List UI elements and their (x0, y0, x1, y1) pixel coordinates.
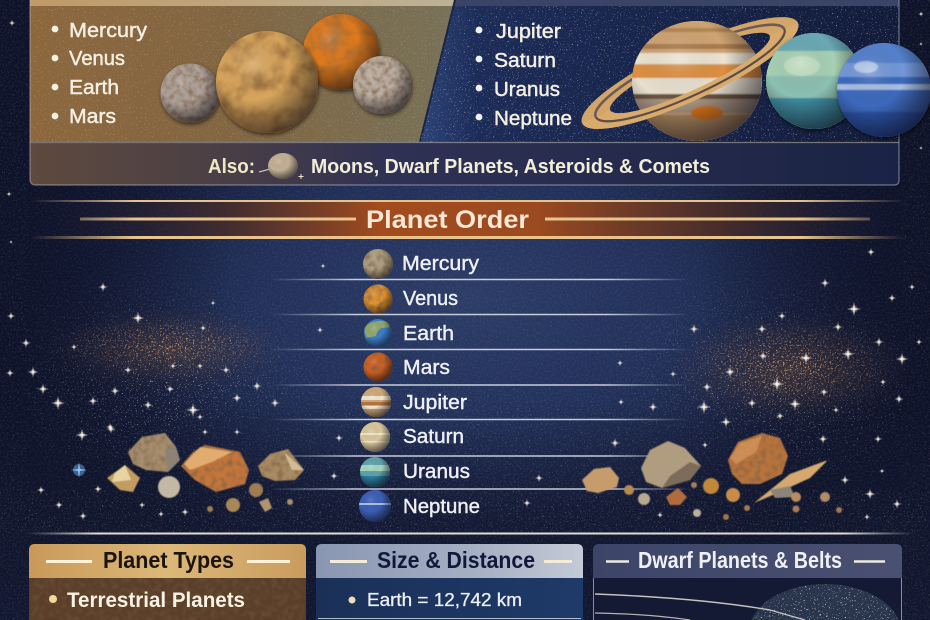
heading: Dwarf Planets & Belts (638, 547, 842, 573)
heading (29, 544, 306, 578)
item: uranus: Uranus (403, 461, 470, 483)
list: terrestrial planets: Mercury (69, 20, 147, 42)
list: terrestrial planets: Earth (69, 77, 119, 99)
icon: small asteroid (259, 153, 304, 179)
footer note: Moons, Dwarf Planets, Asteroids & Comets (311, 156, 710, 178)
panel: size and distance (316, 544, 583, 620)
list: gas giants (476, 21, 572, 130)
heading: Size & Distance (377, 547, 535, 573)
item: venus (364, 284, 458, 314)
heading (593, 544, 902, 578)
planet: uranus (764, 32, 854, 133)
item: jupiter: Jupiter (403, 392, 467, 414)
panel: dwarf planets and belts (593, 544, 905, 620)
terrestrial section (30, 0, 460, 142)
item: uranus (360, 457, 470, 487)
footer strip (30, 0, 899, 185)
list: terrestrial planets (52, 20, 147, 128)
item: mercury (363, 249, 479, 279)
panel: planet types (29, 544, 306, 620)
item: earth: Earth (403, 323, 454, 345)
planet: ringed gas giant (582, 17, 798, 141)
asteroids: right cluster (582, 433, 842, 520)
item: mars: Mars (403, 357, 450, 379)
planet: neptune (832, 38, 930, 142)
list: terrestrial planets: Mars (69, 106, 116, 128)
divider (25, 532, 915, 534)
item: neptune (359, 490, 480, 522)
list: gas giants: Uranus (494, 79, 560, 101)
heading: Planet Types (103, 547, 234, 573)
item: mercury: Mercury (402, 253, 479, 275)
asteroids: left cluster (107, 433, 304, 512)
list: terrestrial planets: Venus (69, 48, 125, 70)
planet: venus (216, 31, 318, 133)
planet: mars (303, 14, 379, 90)
footer note: Also: (208, 156, 255, 178)
list: gas giants: Neptune (494, 108, 572, 130)
item: saturn (360, 422, 464, 452)
item: earth (364, 319, 454, 347)
item: neptune: Neptune (403, 496, 480, 518)
item: jupiter (360, 387, 467, 417)
gas giants section (420, 0, 899, 142)
section banner: planet order (30, 201, 905, 238)
panel: planets overview (30, 0, 930, 185)
heading (316, 544, 583, 578)
list: gas giants: Saturn (494, 50, 556, 72)
planet: mercury (160, 64, 220, 122)
list: planet order (270, 249, 690, 522)
list: gas giants: Jupiter (496, 21, 561, 43)
text: earth size: Earth = 12,742 km (367, 590, 522, 610)
planet: rocky moon (353, 56, 411, 114)
text: terrestrial planets: Terrestrial Planets (67, 589, 245, 612)
item: saturn: Saturn (403, 426, 464, 448)
item: venus: Venus (403, 288, 458, 310)
section banner: planet order: Planet Order (366, 206, 529, 234)
item: mars (364, 352, 450, 382)
illustration: asteroid belt (595, 584, 898, 620)
footer note (208, 153, 710, 179)
